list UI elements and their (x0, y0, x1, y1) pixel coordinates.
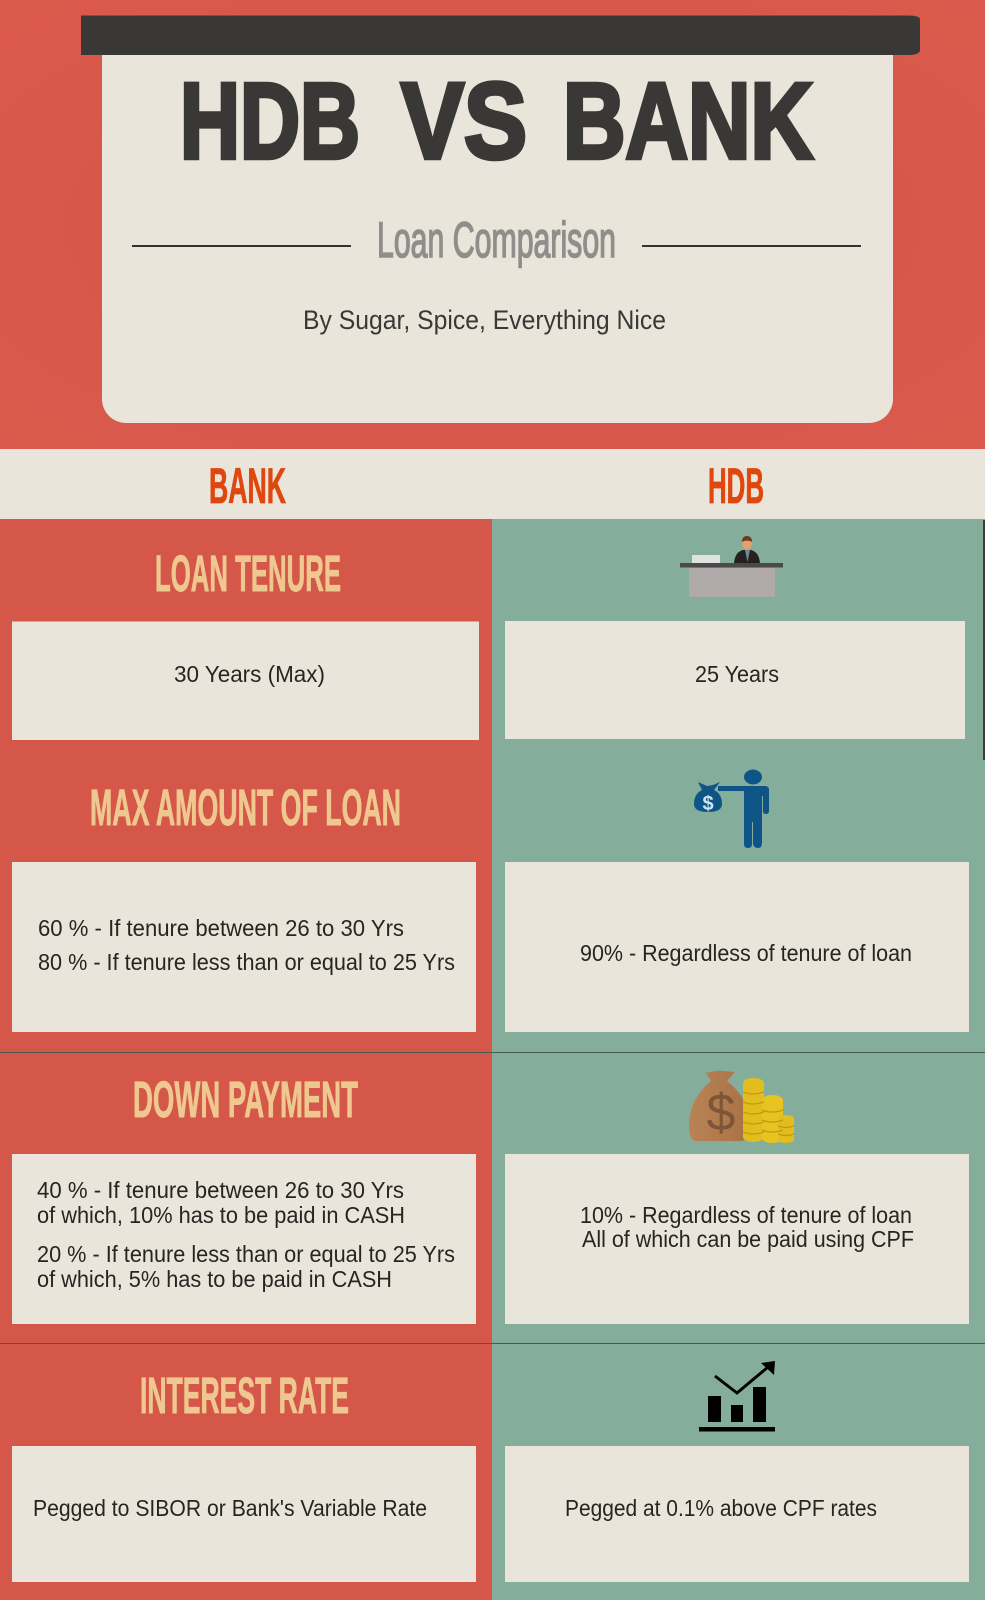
column heading: bank: BANK (209, 458, 286, 514)
scroll marker (983, 520, 985, 760)
panel: bank max amount: 60 % - If tenure between 26 to 30 Yrs (38, 915, 404, 941)
subtitle: Loan Comparison (377, 212, 616, 268)
column heading: hdb: HDB (708, 458, 764, 514)
heading: down payment: DOWN PAYMENT (133, 1071, 358, 1128)
panel: hdb interest rate: Pegged at 0.1% above CPF rates (565, 1495, 877, 1521)
heading: loan tenure: LOAN TENURE (155, 545, 341, 602)
main title word: VS: VS (401, 60, 527, 181)
main title word: HDB: HDB (180, 60, 360, 181)
panel: bank loan tenure (12, 622, 479, 740)
panel: hdb down payment: All of which can be paid using CPF (582, 1226, 914, 1252)
card top bar (81, 16, 920, 55)
panel: hdb max amount: 90% - Regardless of tenure of loan (580, 940, 912, 966)
divider (0, 1343, 985, 1344)
panel: bank max amount (12, 862, 476, 1032)
icon: man holding money bag: $ (702, 793, 714, 815)
panel: bank loan tenure: 30 Years (Max) (174, 661, 325, 687)
byline: By Sugar, Spice, Everything Nice (303, 305, 666, 335)
right column background (492, 519, 985, 1600)
heading: max amount of loan: MAX AMOUNT OF LOAN (90, 779, 401, 836)
title card (81, 16, 920, 423)
panel: hdb interest rate (505, 1446, 969, 1582)
main title word: BANK: BANK (563, 60, 813, 181)
panel: bank down payment: of which, 10% has to be paid in CASH (37, 1202, 405, 1228)
header background (0, 0, 985, 449)
icon: money bag and coins: $ (707, 1084, 736, 1142)
panel: hdb down payment (505, 1154, 969, 1324)
icon: desk clerk (680, 536, 783, 597)
column header band (0, 449, 985, 519)
subtitle rule left (132, 245, 351, 247)
panel: bank down payment: 40 % - If tenure between 26 to 30 Yrs (37, 1177, 404, 1203)
panel: hdb max amount (505, 862, 969, 1032)
icon: money bag and coins (689, 1071, 794, 1143)
panel: hdb loan tenure (505, 621, 965, 739)
icon: man holding money bag (694, 770, 769, 848)
panel: bank down payment: of which, 5% has to be paid in CASH (37, 1266, 392, 1292)
panel: bank interest rate: Pegged to SIBOR or Bank's Variable Rate (33, 1495, 427, 1521)
heading: interest rate: INTEREST RATE (140, 1367, 349, 1424)
subtitle rule right (642, 245, 861, 247)
panel: bank interest rate (12, 1446, 476, 1582)
icon: rising bar chart (699, 1361, 775, 1432)
panel: bank down payment: 20 % - If tenure less than or equal to 25 Yrs (37, 1241, 455, 1267)
left column background (0, 519, 492, 1600)
divider (0, 1052, 985, 1053)
panel: hdb loan tenure: 25 Years (695, 661, 779, 687)
panel: bank max amount: 80 % - If tenure less than or equal to 25 Yrs (38, 949, 455, 975)
panel: hdb down payment: 10% - Regardless of tenure of loan (580, 1202, 912, 1228)
panel: bank down payment (12, 1154, 476, 1324)
